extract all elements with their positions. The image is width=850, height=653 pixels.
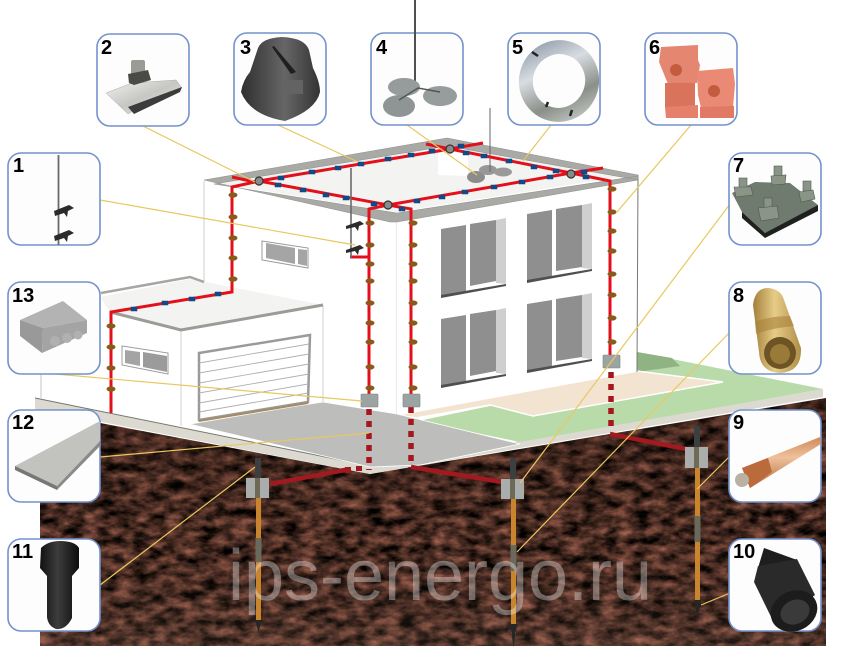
panel 7: bolted plate clamp — [729, 153, 821, 245]
window upper right — [527, 203, 593, 283]
panel 10: driving tip — [729, 539, 824, 639]
garage window — [122, 346, 168, 374]
panel 11: socket bolt — [8, 539, 100, 631]
conductor clips: blue — [131, 144, 589, 311]
lightning conductor network — [111, 143, 610, 413]
roof air terminal rod — [346, 168, 364, 258]
main house — [204, 138, 638, 414]
panel 9: copper-bonded rod: 9 — [733, 412, 744, 434]
panel 8: brass coupler — [729, 282, 821, 374]
panel 2: roof clamp — [97, 34, 189, 126]
garage door — [199, 335, 310, 422]
panel 10: driving tip: 10 — [733, 541, 755, 563]
panel 8: brass coupler: 8 — [733, 285, 744, 307]
panel 6: copper holders — [645, 33, 737, 125]
panel 4: mast base: 4 — [376, 37, 388, 59]
leader lines — [55, 125, 730, 605]
panel 13: junction box — [8, 282, 100, 374]
side window — [262, 241, 308, 268]
panel 3: concrete holder cap — [234, 33, 326, 125]
window lower left — [441, 308, 507, 388]
panel 9: copper-bonded rod — [729, 410, 821, 502]
earth electrode centre — [501, 458, 524, 647]
roof mast with weighted base — [467, 108, 512, 183]
watermark: ips-energo.ru — [228, 536, 652, 616]
garage — [41, 277, 323, 426]
roof junction clamps — [255, 145, 575, 209]
panel 4: mast base — [371, 0, 463, 125]
underground conductor — [270, 372, 686, 484]
panel 5: wire coil — [508, 33, 602, 125]
panel 12: flat strip: 12 — [12, 412, 34, 434]
panel 13: junction box: 13 — [12, 285, 34, 307]
panel 1: air terminal: 1 — [13, 155, 24, 177]
window upper left — [441, 218, 507, 298]
earth electrode right — [685, 426, 708, 618]
panel 12: flat strip — [8, 410, 100, 502]
panel 1: air terminal — [8, 153, 100, 245]
window lower right — [527, 293, 593, 373]
ground slab and paving — [35, 352, 823, 474]
earth electrode left — [246, 458, 269, 632]
panel 11: socket bolt: 11 — [12, 541, 33, 563]
panel 7: bolted plate clamp: 7 — [733, 155, 744, 177]
flat roof — [216, 146, 626, 212]
panel 2: roof clamp: 2 — [101, 37, 112, 59]
test junction boxes — [361, 355, 620, 407]
conductor holders: brown — [106, 186, 616, 392]
soil ground — [40, 390, 826, 646]
panel 6: copper holders: 6 — [649, 37, 660, 59]
panel 5: wire coil: 5 — [512, 37, 523, 59]
panel 3: concrete holder cap: 3 — [240, 37, 251, 59]
